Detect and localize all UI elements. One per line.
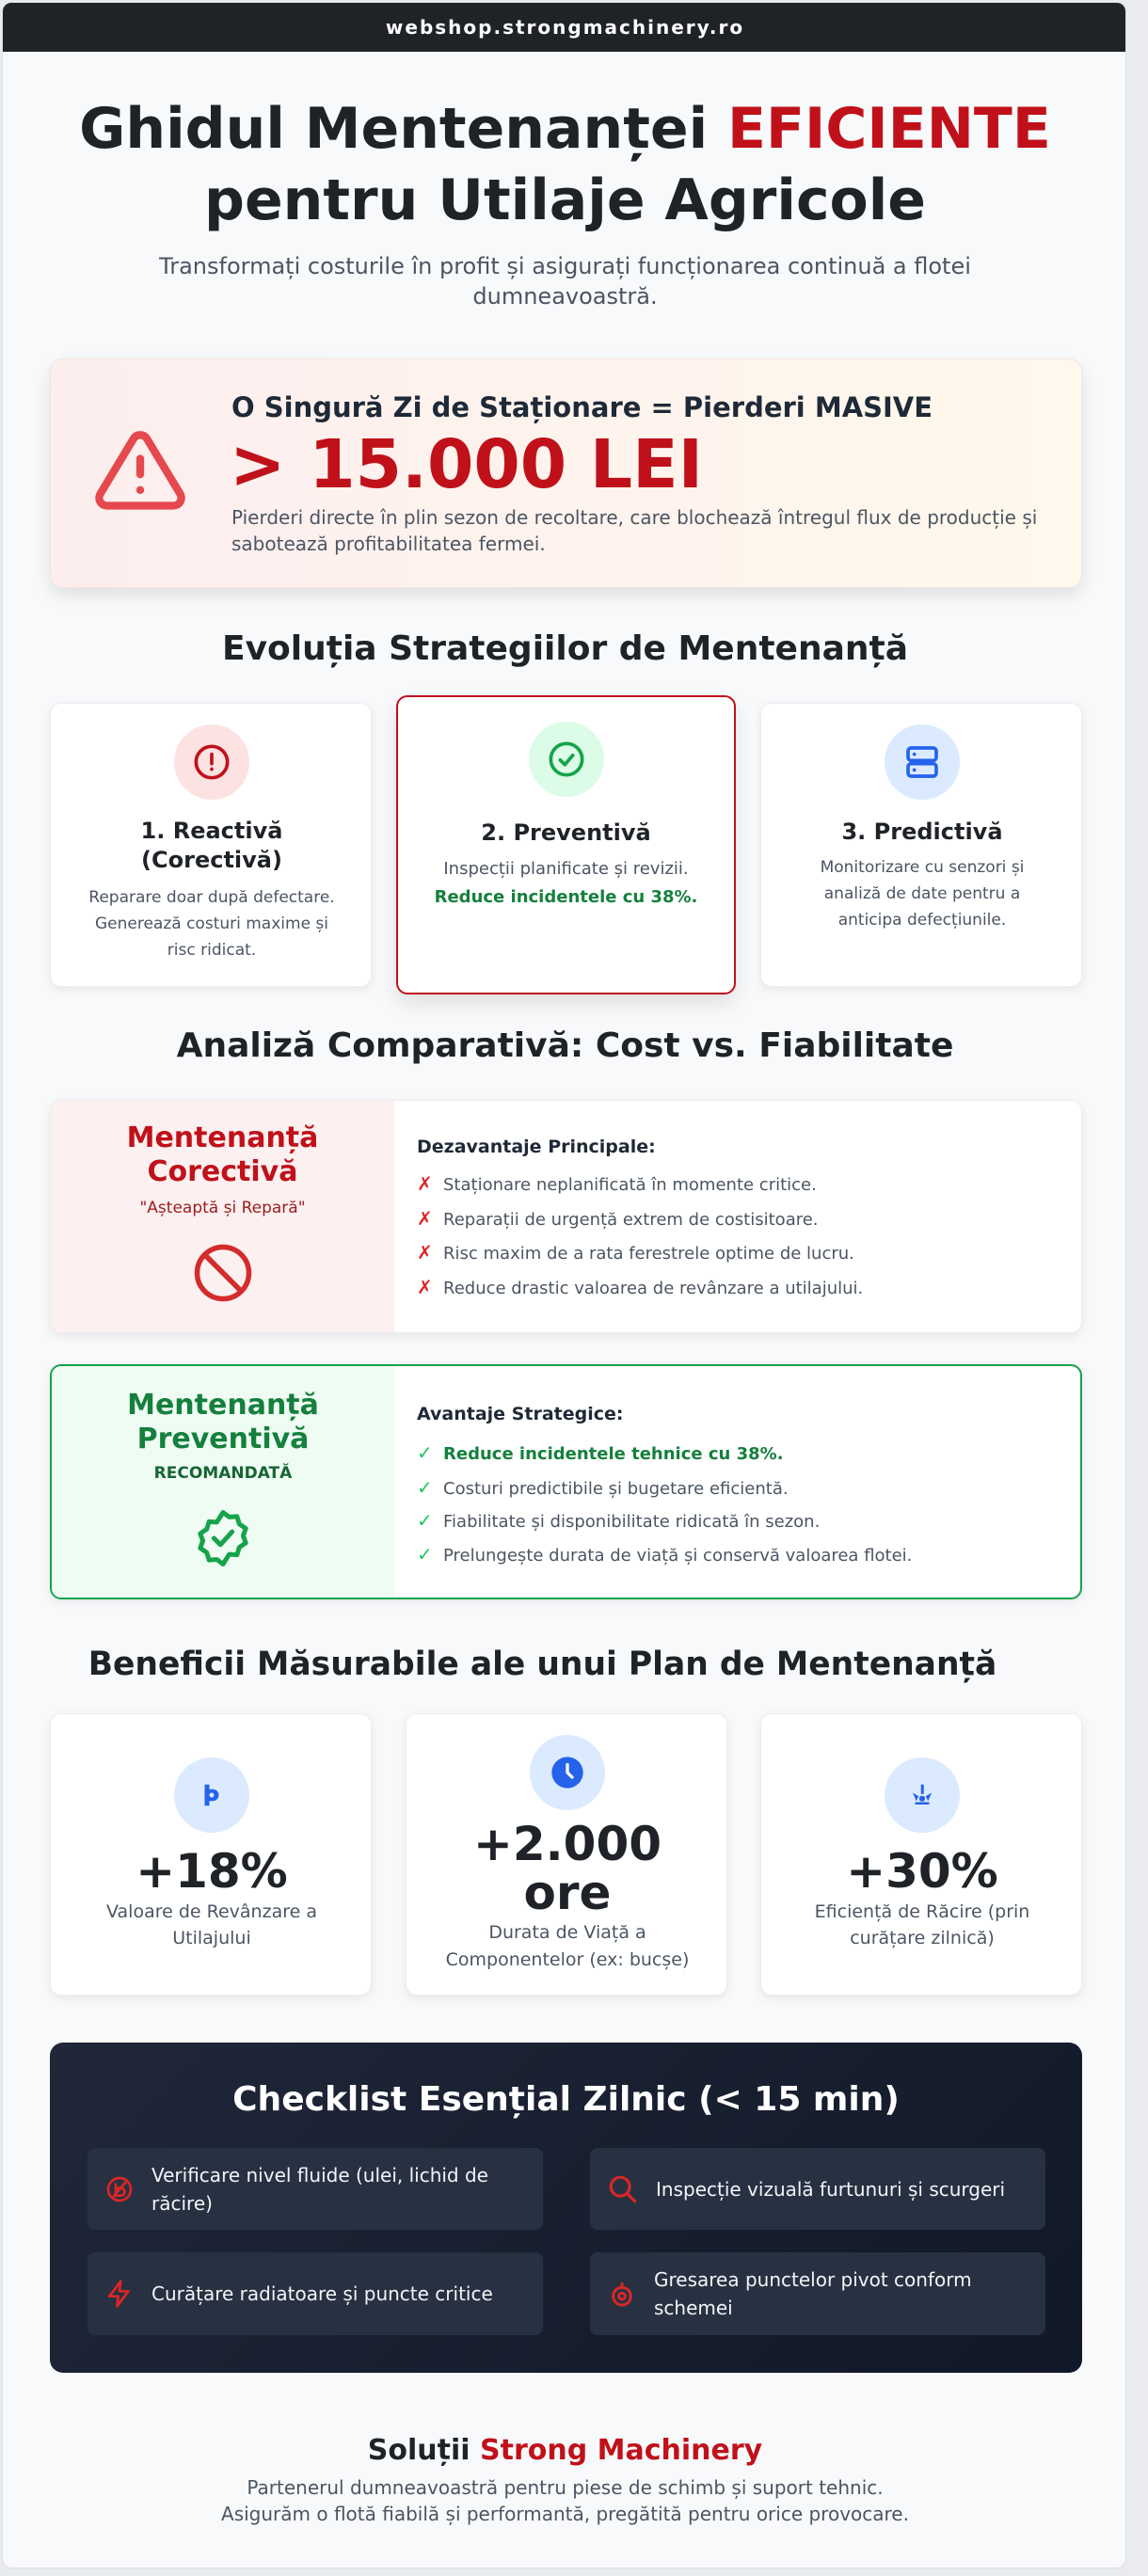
item: fluids: [88, 2148, 543, 2230]
title: [127, 1121, 318, 1188]
item: visual inspection: [590, 2148, 1045, 2230]
number: +18%: [136, 1844, 288, 1899]
footer heading: Soluții Strong Machinery: [368, 2434, 762, 2467]
advantages list: Costuri predictibile și bugetare eficientă.: [443, 1479, 789, 1499]
left side: [51, 1101, 394, 1334]
item: visual inspection: Inspecție vizuală furtunuri și scurgeri: [656, 2177, 1005, 2200]
icon: clock: [530, 1735, 605, 1810]
label: Eficiență de Răcire (prin curățare zilnică): [815, 1901, 1029, 1948]
advantages list: Avantaje Strategice:: [417, 1404, 623, 1424]
advantages list: ✓: [417, 1509, 433, 1532]
icon: fan: [885, 1757, 960, 1833]
heading: evolution: Evoluția Strategiilor de Mentenanță: [222, 629, 908, 668]
text: Reparare doar după defectare. Generează costuri maxime și risc ridicat.: [88, 888, 335, 960]
heading: benefits: Beneficii Măsurabile ale unui Plan de Mentenanță: [88, 1646, 997, 1683]
footer text: Partenerul dumneavoastră pentru piese de schimb și suport tehnic.: [247, 2476, 884, 2499]
footer text: [221, 2476, 909, 2525]
alert heading: O Singură Zi de Staționare = Pierderi MASIVE: [231, 391, 933, 423]
title: [79, 96, 1051, 233]
icon: prohibited: [194, 1244, 252, 1302]
number: +2.000: [473, 1817, 662, 1871]
recommended tag: RECOMANDATĂ: [154, 1464, 292, 1483]
title: [127, 1389, 319, 1455]
title: Ghidul Mentenanței EFICIENTE: [79, 96, 1051, 162]
disadvantages list: Risc maxim de a rata ferestrele optime de lucru.: [443, 1244, 854, 1264]
footer text: Asigurăm o flotă fiabilă și performantă, pregătită pentru orice provocare.: [221, 2503, 909, 2525]
advantages list: Prelungește durata de viață și conservă valoarea flotei.: [443, 1546, 912, 1566]
heading: comparative analysis: Analiză Comparativă: Cost vs. Fiabilitate: [177, 1026, 953, 1065]
icon: exclamation: [174, 724, 249, 800]
quote: "Așteaptă și Repară": [139, 1199, 306, 1217]
number: +30%: [846, 1844, 998, 1899]
item: radiator cleaning: [88, 2252, 543, 2335]
header bar: [3, 3, 1127, 52]
card: reactive: [50, 703, 372, 987]
title: 2. Preventivă: [481, 819, 651, 846]
benefit card: resale value: [50, 1713, 372, 1996]
title: Preventivă: [137, 1423, 309, 1455]
text: Reduce incidentele cu 38%.: [435, 887, 697, 907]
title: Corectivă: [147, 1155, 297, 1188]
advantages list: ✓: [417, 1476, 433, 1499]
disadvantages list: ✗: [417, 1276, 433, 1298]
icon: warning triangle: [95, 431, 185, 510]
disadvantages list: ✗: [417, 1172, 433, 1195]
advantages list: ✓: [417, 1441, 433, 1464]
card: preventive (highlighted): [396, 695, 736, 994]
title: 3. Predictivă: [841, 819, 1003, 845]
disadvantages list: ✗: [417, 1241, 433, 1264]
disadvantages list: Reparații de urgență extrem de costisitoare.: [443, 1210, 819, 1230]
left side: [52, 1366, 394, 1601]
card: predictive: [760, 703, 1082, 987]
title: [141, 818, 282, 873]
disadvantages list: Reduce drastic valoarea de revânzare a utilajului.: [443, 1279, 863, 1298]
title: (Corectivă): [141, 847, 282, 873]
disadvantages list: [417, 1137, 863, 1298]
icon: server: [885, 724, 960, 800]
text: Inspecții planificate și revizii.: [443, 859, 689, 879]
alert panel: downtime loss: [50, 358, 1082, 588]
number: ore: [524, 1866, 611, 1920]
advantages list: Fiabilitate și disponibilitate ridicată în sezon.: [443, 1512, 820, 1532]
item: greasing: Gresarea punctelor pivot conform schemei: [654, 2268, 972, 2319]
title: Mentenanță: [127, 1389, 319, 1422]
panel: preventive maintenance: [50, 1364, 1082, 1599]
advantages list: ✓: [417, 1543, 433, 1566]
label: Valoare de Revânzare a Utilajului: [106, 1901, 317, 1948]
benefit card: component life: [406, 1713, 727, 1996]
item: greasing: [590, 2252, 1045, 2335]
text: [435, 859, 697, 907]
disadvantages list: ✗: [417, 1207, 433, 1230]
title: 1. Reactivă: [141, 818, 282, 844]
number: [473, 1817, 662, 1920]
title: Mentenanță: [127, 1121, 318, 1154]
item: radiator cleaning: Curățare radiatoare și puncte critice: [151, 2282, 493, 2305]
icon: [174, 1757, 249, 1833]
label: Durata de Viață a Componentelor (ex: bucșe): [446, 1922, 689, 1970]
subtitle: Transformați costurile în profit și asigurați funcționarea continuă a flotei dumneavoastră.: [159, 253, 971, 310]
panel: corrective maintenance: [50, 1100, 1082, 1333]
disadvantages list: Staționare neplanificată în momente critice.: [443, 1175, 817, 1195]
checklist title: Checklist Esențial Zilnic (< 15 min): [232, 2080, 900, 2119]
advantages list: [417, 1404, 912, 1566]
header bar: webshop.strongmachinery.ro: [386, 16, 744, 39]
benefit card: cooling efficiency: [760, 1713, 1082, 1996]
alert big number: > 15.000 LEI: [230, 425, 703, 503]
icon: check circle: [529, 722, 604, 797]
text: Monitorizare cu senzori și analiză de date pentru a anticipa defecțiunile.: [821, 858, 1024, 930]
panel: daily checklist: [50, 2043, 1082, 2373]
icon: badge check: [198, 1510, 248, 1566]
item: fluids: Verificare nivel fluide (ulei, lichid de răcire): [151, 2164, 488, 2215]
advantages list: Reduce incidentele tehnice cu 38%.: [443, 1444, 784, 1464]
alert description: Pierderi directe în plin sezon de recoltare, care blochează întregul flux de producție și sabotează profitabilitatea fermei.: [231, 506, 1037, 555]
title: pentru Utilaje Agricole: [204, 167, 926, 233]
disadvantages list: Dezavantaje Principale:: [417, 1137, 656, 1157]
